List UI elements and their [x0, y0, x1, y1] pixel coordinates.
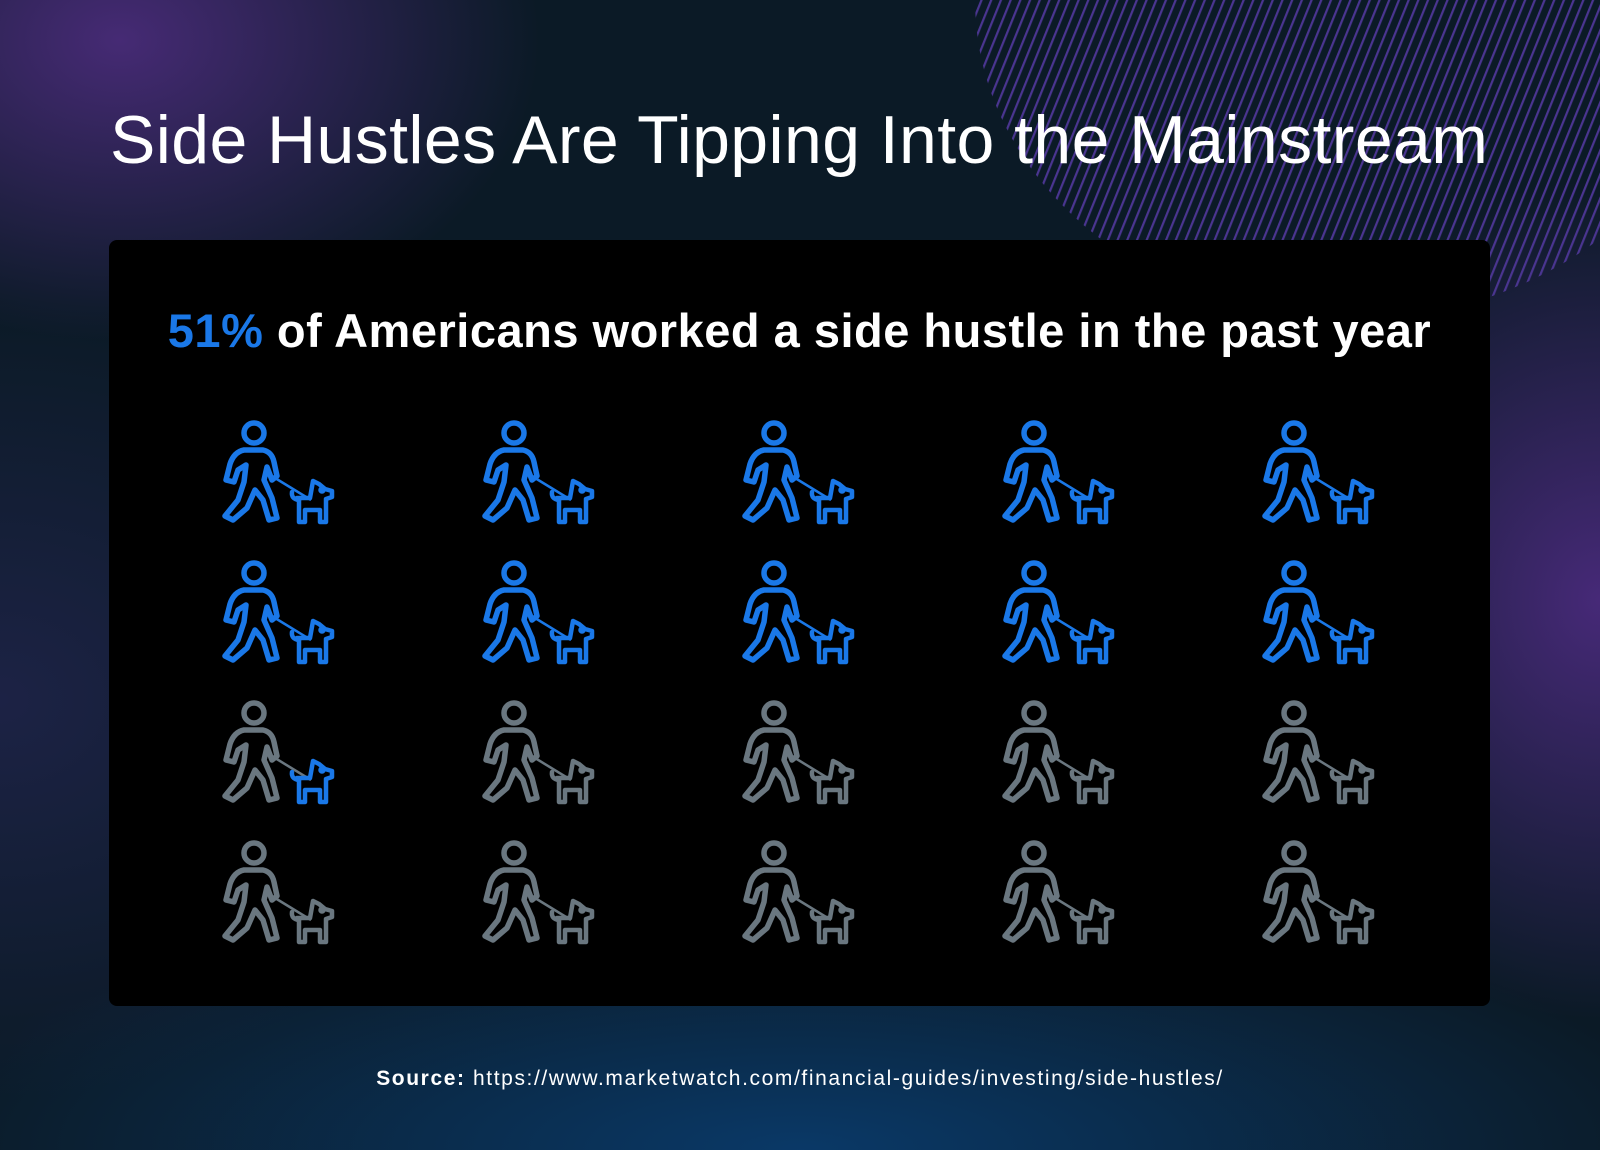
icon grid — [222, 420, 1374, 944]
title: Side Hustles Are Tipping Into the Mainstream — [110, 102, 1488, 178]
row 2 icons (blue) — [225, 563, 1372, 662]
decorative stripe pattern — [975, 0, 1600, 296]
source line: Source: https://www.marketwatch.com/financial-guides/investing/side-hustles/ — [376, 1067, 1224, 1090]
row 1 icons (blue) — [225, 423, 1372, 522]
row 4 icons (gray) — [225, 843, 1372, 942]
subtitle: 51% of Americans worked a side hustle in the past year — [168, 304, 1431, 357]
row 3 icons (first half-blue, rest gray) — [225, 703, 1372, 802]
panel: main chart — [109, 240, 1490, 1006]
